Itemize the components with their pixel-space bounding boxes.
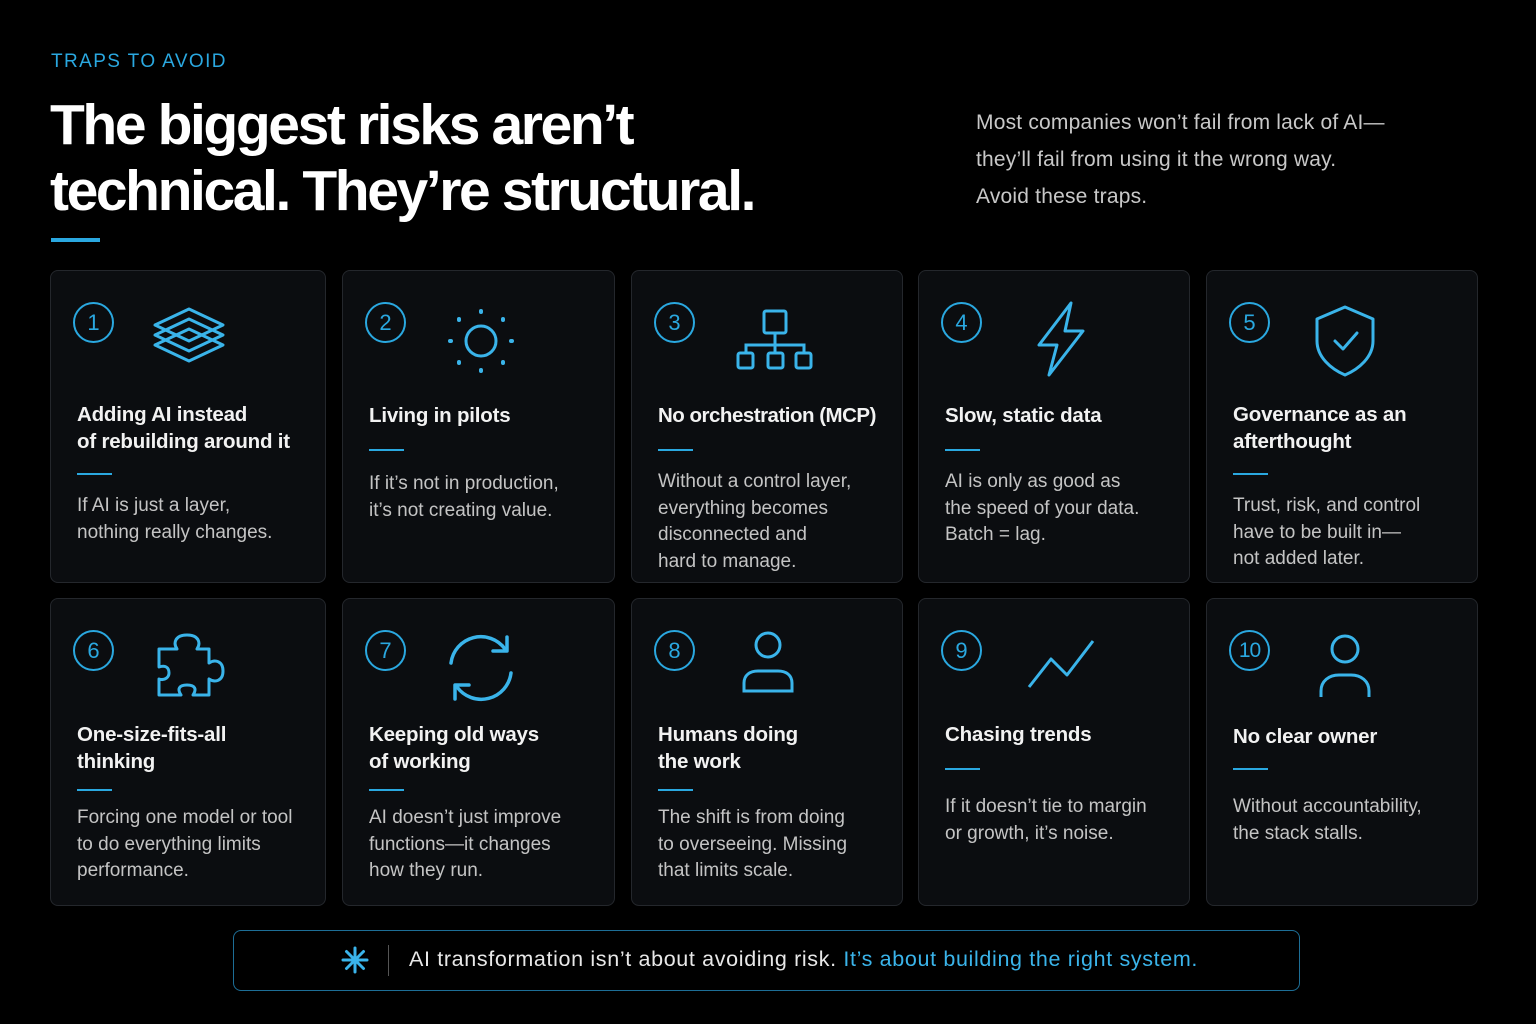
- intro text: they’ll fail from using it the wrong way.: [976, 148, 1336, 171]
- icon: person: [742, 632, 794, 692]
- panel: card 1: If AI is just a layer,: [77, 495, 230, 516]
- panel: card 6: [50, 598, 326, 906]
- panel: card 8: The shift is from doing: [658, 807, 845, 828]
- panel: card 3: everything becomes: [658, 498, 828, 518]
- panel: card 10: the stack stalls.: [1233, 822, 1363, 844]
- panel: card 6: performance.: [77, 860, 189, 881]
- panel: card 4: 4: [955, 310, 968, 335]
- panel: card 4: [918, 270, 1190, 583]
- panel: card 7: how they run.: [369, 860, 483, 881]
- icon: layers: [153, 308, 224, 362]
- panel: card 6: to do everything limits: [77, 834, 261, 854]
- panel: card 7: functions—it changes: [369, 834, 551, 854]
- panel: card 4: AI is only as good as: [945, 471, 1120, 492]
- panel: card 8: that limits scale.: [658, 860, 793, 881]
- panel: card 5: [1206, 270, 1478, 583]
- panel: card 10: [1206, 598, 1478, 906]
- panel: card 5: Governance as an: [1233, 403, 1406, 426]
- callout banner: [233, 930, 1300, 991]
- panel: card 4: the speed of your data.: [945, 498, 1139, 518]
- panel: card 2: Living in pilots: [369, 404, 510, 427]
- panel: card 1: of rebuilding around it: [77, 430, 290, 453]
- panel: card 2: it’s not creating value.: [369, 500, 552, 520]
- panel: card 6: thinking: [77, 750, 155, 773]
- panel: card 8: 8: [668, 638, 681, 663]
- icon: trend line: [1028, 640, 1094, 688]
- panel: card 8: Humans doing: [658, 723, 798, 746]
- panel: card 7: of working: [369, 750, 471, 773]
- panel: card 10: 10: [1239, 639, 1260, 662]
- icon: user: [1320, 634, 1370, 697]
- panel: card 3: 3: [668, 310, 681, 335]
- panel: card 9: 9: [955, 638, 968, 663]
- intro text: Avoid these traps.: [976, 185, 1147, 208]
- panel: card 4: Slow, static data: [945, 404, 1101, 427]
- panel: card 10: No clear owner: [1233, 725, 1377, 748]
- panel: card 6: One-size-fits-all: [77, 723, 226, 746]
- panel: card 3: disconnected and: [658, 524, 807, 545]
- panel: card 9: or growth, it’s noise.: [945, 822, 1114, 844]
- panel: card 1: Adding AI instead: [77, 403, 247, 426]
- panel: card 1: [50, 270, 326, 583]
- panel: card 7: Keeping old ways: [369, 723, 539, 746]
- panel: card 2: If it’s not in production,: [369, 473, 559, 494]
- panel: card 5: 5: [1243, 310, 1256, 335]
- panel: card 3: hard to manage.: [658, 550, 796, 572]
- panel: card 5: not added later.: [1233, 548, 1364, 569]
- title: [50, 93, 754, 223]
- panel: card 10: Without accountability,: [1233, 796, 1422, 817]
- title: technical. They’re structural.: [50, 159, 754, 223]
- panel: card 4: Batch = lag.: [945, 524, 1046, 545]
- panel: card 5: afterthought: [1233, 430, 1351, 453]
- panel: card 8: to overseeing. Missing: [658, 834, 847, 854]
- panel: card 2: 2: [379, 310, 392, 335]
- panel: card 5: have to be built in—: [1233, 522, 1401, 542]
- panel: card 7: [342, 598, 615, 906]
- panel: card 9: Chasing trends: [945, 723, 1091, 746]
- accent bar: [51, 238, 100, 242]
- icon: puzzle: [158, 634, 224, 696]
- panel: card 7: 7: [379, 638, 392, 663]
- panel: card 2: [342, 270, 615, 583]
- icon: org chart: [736, 310, 812, 370]
- panel: card 1: nothing really changes.: [77, 522, 272, 542]
- icon: lightning: [1037, 302, 1085, 376]
- panel: card 1: 1: [87, 310, 100, 335]
- eyebrow label: TRAPS TO AVOID: [51, 51, 227, 72]
- intro text: Most companies won’t fail from lack of AI—: [976, 111, 1385, 134]
- panel: card 3: Without a control layer,: [658, 471, 851, 492]
- panel: card 8: [631, 598, 903, 906]
- icon: shield: [1316, 306, 1374, 376]
- panel: card 9: [918, 598, 1190, 906]
- icon: refresh: [449, 634, 513, 702]
- panel: card 9: If it doesn’t tie to margin: [945, 796, 1147, 817]
- icon: sun: [448, 309, 514, 373]
- panel: card 6: Forcing one model or tool: [77, 807, 292, 828]
- icon: asterisk: [342, 946, 368, 974]
- panel: card 6: 6: [87, 638, 100, 663]
- panel: card 3: No orchestration (MCP): [658, 404, 876, 427]
- panel: card 5: Trust, risk, and control: [1233, 495, 1420, 516]
- callout text: AI transformation isn’t about avoiding risk. It’s about building the right system.: [409, 947, 1198, 971]
- title: The biggest risks aren’t: [50, 93, 632, 157]
- intro text: [976, 111, 1385, 208]
- panel: card 7: AI doesn’t just improve: [369, 807, 561, 828]
- panel: card 8: the work: [658, 750, 741, 773]
- panel: card 3: [631, 270, 903, 583]
